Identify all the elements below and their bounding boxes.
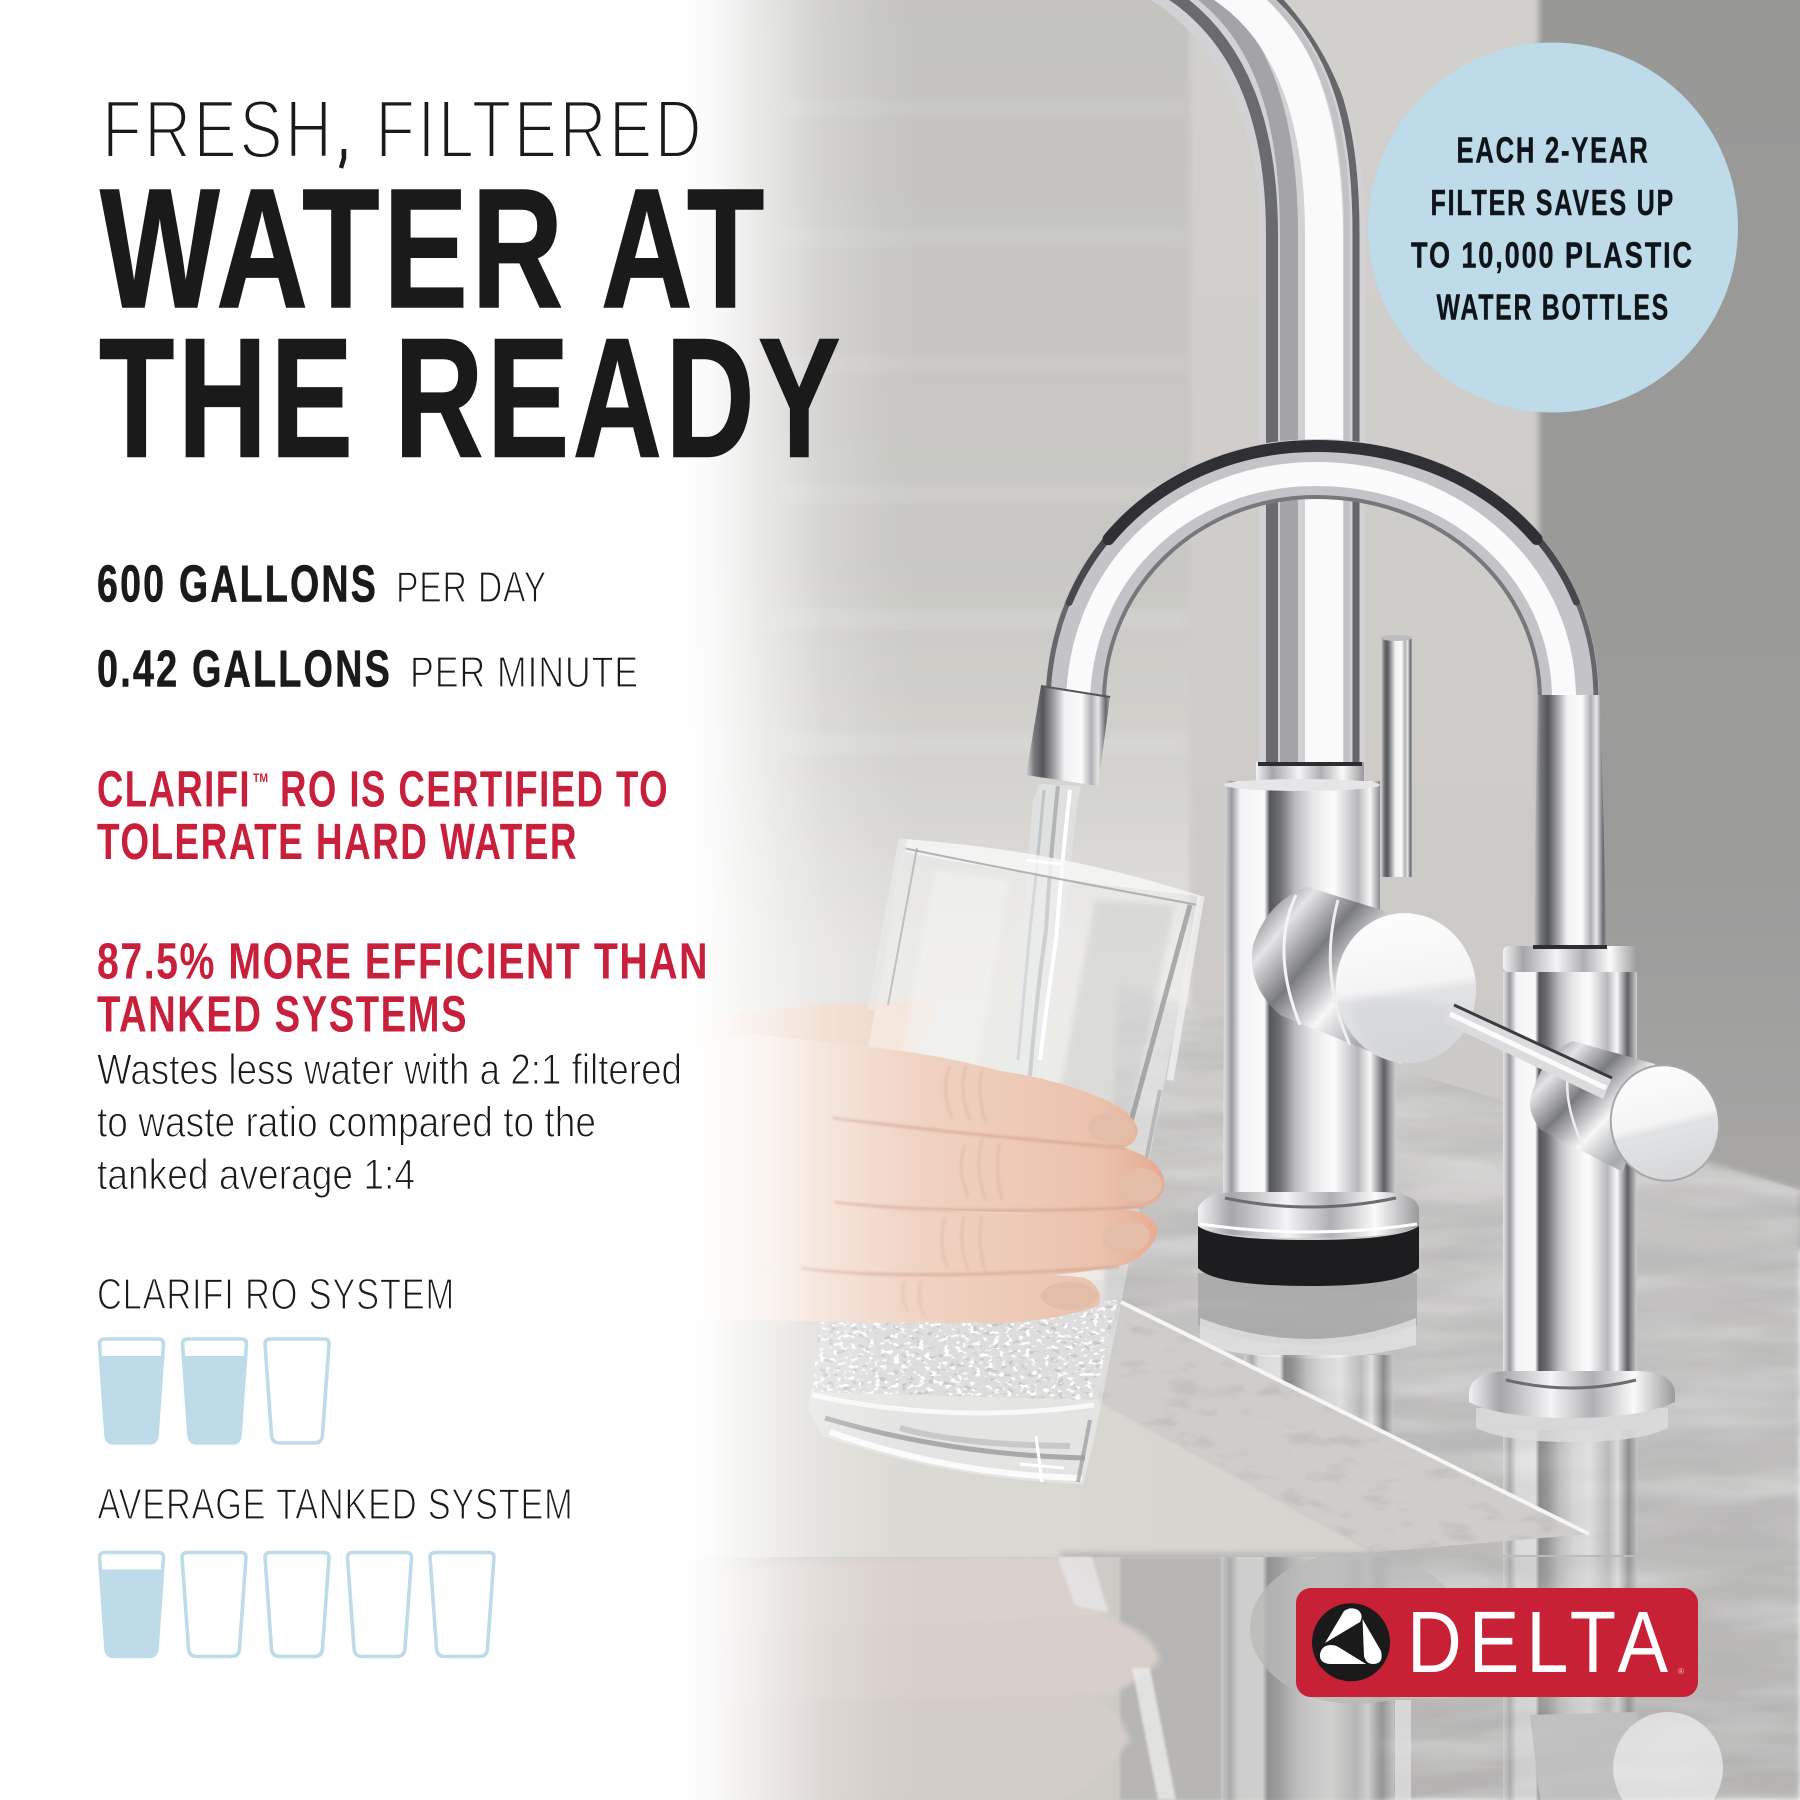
photo: kitchen scene background (680, 0, 1800, 1800)
rear faucet handle (1252, 887, 1486, 1072)
efficiency body text: to waste ratio compared to the (97, 1098, 596, 1146)
hard water certification claim (97, 760, 669, 870)
callout: filter saves plastic bottles: TO 10,000 PLASTIC (1411, 234, 1694, 276)
efficiency body text (97, 1046, 682, 1199)
wordmark: DELTA (1407, 1594, 1675, 1691)
icon: delta triangle mark (1312, 1603, 1390, 1681)
efficiency claim (97, 932, 709, 1199)
finger 2 (690, 1117, 1164, 1214)
callout: filter saves plastic bottles: WATER BOTTLES (1436, 286, 1670, 328)
water with bubbles (810, 1300, 1120, 1400)
logo: Delta (1296, 1588, 1698, 1697)
reflection: faucets (1221, 1552, 1723, 1800)
efficiency body text: tanked average 1:4 (97, 1151, 415, 1199)
spout lower straight (1533, 695, 1607, 950)
drinking glass (808, 839, 1201, 1484)
hard water certification claim: TM (253, 771, 268, 785)
icon: empty glass (265, 1339, 329, 1443)
tall rear faucet (1095, 0, 1486, 1286)
title line: fresh, filtered: FRESH, FILTERED (102, 82, 704, 176)
rear faucet base ring (1198, 1192, 1419, 1238)
hard water certification claim: RO IS CERTIFIED TO (280, 760, 669, 818)
reflection: faucets on polished counter (1198, 1273, 1668, 1555)
icon: empty glass 3 (348, 1552, 412, 1656)
rear faucet body (1223, 779, 1396, 1208)
water stream into glass (1008, 784, 1081, 1078)
ring under gooseneck (1256, 762, 1364, 782)
white text panel fading into photo (0, 0, 920, 1800)
icon: empty glass 2 (265, 1552, 329, 1656)
spout nozzle aerator (1026, 686, 1110, 786)
spout arch (1048, 444, 1596, 760)
reflective surface below ledge (680, 1552, 1723, 1800)
lower ledge surface (680, 1280, 1380, 1560)
front faucet base (1469, 1371, 1675, 1418)
finger creases and knuckles (801, 1066, 1144, 1316)
callout: filter saves plastic bottles: EACH 2-YEAR (1456, 130, 1650, 170)
icon: empty glass 4 (430, 1552, 494, 1656)
wall: blurred brick (680, 0, 1200, 1400)
registered mark: ® (1678, 1667, 1684, 1676)
front faucet column (1503, 972, 1637, 1377)
hard water certification claim: TOLERATE HARD WATER (97, 813, 578, 870)
icon: filled glass 1 (100, 1339, 164, 1443)
callout: filter saves plastic bottles: FILTER SAVES UP (1430, 182, 1675, 223)
finger 1 (690, 1034, 1138, 1147)
glass icons: clarifi ratio 2 filtered to 1 waste (100, 1339, 329, 1443)
finger 4 (690, 1265, 1100, 1323)
rear gooseneck upper curve (1151, 0, 1365, 780)
front faucet handle with lever (1444, 1005, 1731, 1192)
efficiency heading (97, 932, 709, 1042)
icon: filled glass 2 (182, 1339, 246, 1443)
callout: filter saves plastic bottles (1368, 42, 1738, 412)
stat: gallons per minute: 0.42 GALLONS (97, 640, 392, 698)
counter front edge face (1095, 1300, 1595, 1555)
thumb behind glass (690, 997, 935, 1060)
arched spout faucet (1026, 444, 1731, 1418)
stat: gallons per day: PER DAY (396, 563, 547, 612)
icon: empty glass 1 (182, 1552, 246, 1656)
hard water certification claim: CLARIFI (97, 760, 251, 818)
title line: water at: WATER AT (100, 154, 768, 344)
front faucet cap (1503, 945, 1637, 972)
black base gasket (1198, 1226, 1419, 1286)
stat: gallons per day: 600 GALLONS (97, 556, 378, 614)
stat: gallons per minute: PER MINUTE (410, 648, 639, 697)
finger 3 (690, 1195, 1157, 1280)
icon: filled glass (100, 1552, 164, 1656)
title (99, 82, 844, 494)
thick glass base (808, 1392, 1094, 1484)
label: clarifi ro system: CLARIFI RO SYSTEM (97, 1270, 455, 1319)
flow rate stats (97, 556, 639, 698)
efficiency body text: Wastes less water with a 2:1 filtered (97, 1046, 682, 1094)
efficiency heading: TANKED SYSTEMS (97, 986, 468, 1042)
label: average tanked system: AVERAGE TANKED SYSTEM (98, 1480, 574, 1529)
reflection: hand (720, 1558, 1160, 1800)
vertical lever rod (1381, 635, 1412, 877)
hand holding glass (690, 1034, 1164, 1323)
title line: the ready: THE READY (99, 304, 844, 494)
glass icons: tanked ratio 1 filtered to 4 waste (100, 1552, 494, 1656)
wall: dark right panel (1538, 0, 1800, 1250)
wall: light centre panel (1190, 0, 1540, 1220)
efficiency heading: 87.5% MORE EFFICIENT THAN (97, 932, 709, 990)
marble counter top (1060, 985, 1800, 1800)
